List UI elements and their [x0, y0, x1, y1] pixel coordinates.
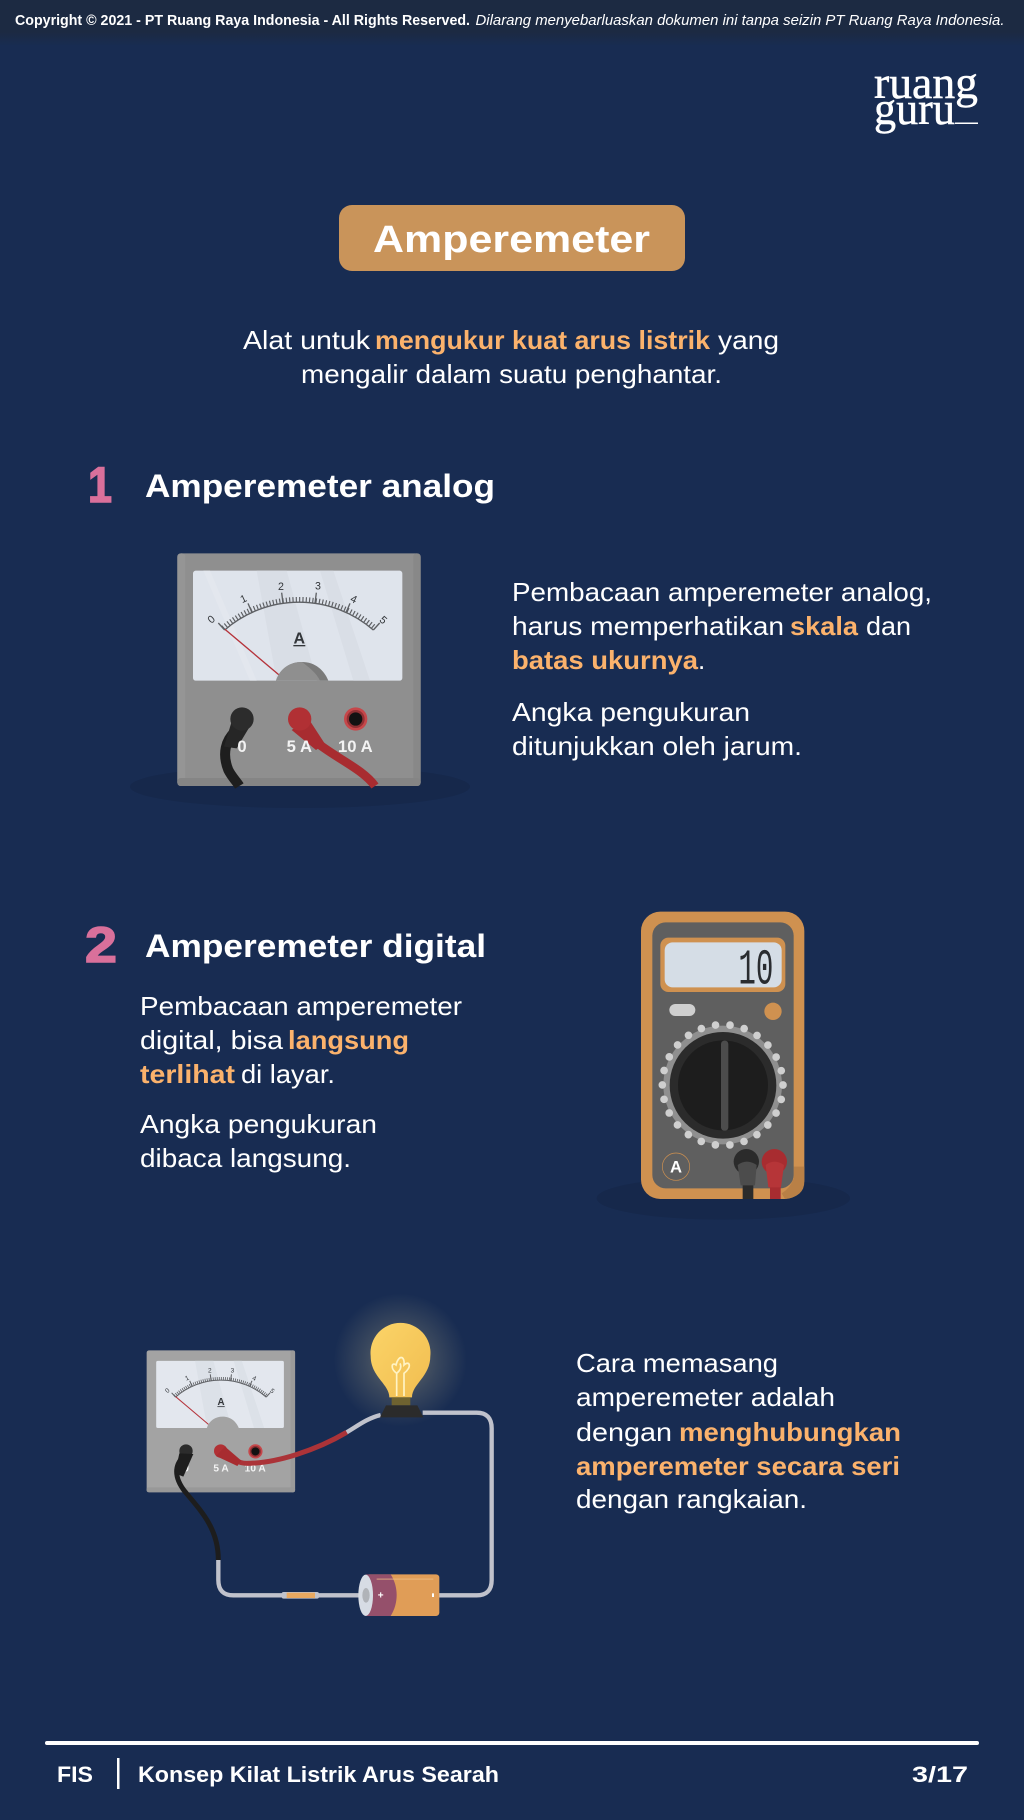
description: digital: Angka pengukuran	[140, 1109, 377, 1139]
battery	[366, 1574, 439, 1616]
footer: Konsep Kilat Listrik Arus Searah	[138, 1762, 499, 1787]
description: analog: ditunjukkan oleh jarum.	[512, 731, 802, 761]
description: analog: skala	[790, 611, 859, 641]
illustration: analog ammeter: 3	[315, 581, 321, 593]
description: circuit: amperemeter adalah	[576, 1382, 835, 1412]
ammeter: 1	[184, 1375, 191, 1383]
display	[660, 938, 785, 992]
description: digital: digital, bisa	[140, 1025, 284, 1055]
ammeter: 4	[251, 1375, 257, 1383]
illustration: analog ammeter: 2	[278, 581, 284, 593]
copyright notice	[15, 13, 1004, 29]
description: circuit: Cara memasang	[576, 1348, 778, 1378]
definition text: mengalir dalam suatu penghantar.	[301, 359, 722, 389]
description: analog: dan	[866, 611, 911, 641]
copyright notice: Copyright © 2021 - PT Ruang Raya Indonesia - All Rights Reserved.	[15, 13, 470, 29]
illustration: analog ammeter	[130, 553, 470, 808]
illustration: analog ammeter: 5 A	[287, 737, 312, 756]
heading 2: Amperemeter digital	[145, 928, 486, 964]
illustration: digital ammeter: A	[670, 1157, 682, 1176]
definition text: Alat untuk	[243, 325, 371, 355]
ammeter: 3	[231, 1367, 235, 1374]
illustration: series circuit: +	[378, 1591, 384, 1602]
description: digital: di layar.	[241, 1059, 335, 1089]
heading 1	[88, 457, 495, 513]
heading 2: 2	[85, 917, 117, 973]
black lead	[177, 1457, 218, 1560]
illustration: analog ammeter: 0	[206, 613, 218, 626]
red lead	[225, 1432, 347, 1463]
description: digital: langsung	[288, 1025, 409, 1055]
description: digital	[140, 991, 462, 1173]
ammeter: 10 A	[245, 1464, 266, 1475]
illustration: analog ammeter: 1	[239, 593, 249, 606]
description: analog: Angka pengukuran	[512, 697, 750, 727]
probes	[743, 1183, 753, 1199]
description: circuit: dengan	[576, 1417, 672, 1447]
footer: 3/17	[912, 1762, 968, 1787]
definition text: mengukur kuat arus listrik	[375, 325, 711, 355]
range badge	[662, 1153, 690, 1180]
bulb	[370, 1323, 430, 1397]
description: circuit	[576, 1348, 901, 1514]
logo: ruangguru: guru	[874, 83, 955, 134]
illustration: analog ammeter: A	[294, 630, 306, 647]
description: digital: dibaca langsung.	[140, 1143, 351, 1173]
heading 1: 1	[88, 457, 112, 513]
illustration: analog ammeter: 10 A	[338, 737, 373, 756]
heading 2	[85, 917, 486, 973]
ammeter: 2	[208, 1368, 212, 1375]
buttons	[669, 1004, 695, 1016]
title badge	[339, 205, 685, 271]
footer: FIS	[57, 1762, 93, 1787]
footer	[45, 1741, 979, 1789]
ammeter: 0	[164, 1387, 172, 1395]
definition text: yang	[718, 325, 779, 355]
ammeter: 5 A	[213, 1464, 229, 1475]
description: circuit: dengan rangkaian.	[576, 1484, 807, 1514]
heading 1: Amperemeter analog	[145, 468, 495, 504]
terminals	[225, 732, 239, 786]
description: analog	[512, 577, 932, 761]
definition text	[243, 325, 779, 389]
ammeter: 0	[183, 1464, 189, 1475]
logo: ruangguru: ruang	[874, 57, 978, 108]
illustration: analog ammeter: 0	[237, 737, 247, 756]
illustration: digital ammeter: 10	[738, 942, 773, 999]
illustration: digital ammeter	[597, 912, 850, 1220]
wires	[423, 1413, 492, 1595]
ammeter: 5	[268, 1388, 276, 1396]
description: digital: Pembacaan amperemeter	[140, 991, 462, 1021]
description: circuit: amperemeter secara seri	[576, 1451, 900, 1481]
logo: ruangguru	[874, 57, 978, 134]
description: circuit: menghubungkan	[679, 1417, 901, 1447]
title badge: Amperemeter	[373, 219, 650, 261]
description: digital: terlihat	[140, 1059, 235, 1089]
dial	[663, 1026, 782, 1144]
illustration: series circuit	[147, 1293, 492, 1616]
copyright notice: Dilarang menyebarluaskan dokumen ini tanpa seizin PT Ruang Raya Indonesia.	[476, 13, 1004, 29]
ammeter	[147, 1350, 295, 1492]
description: analog: harus memperhatikan	[512, 611, 784, 641]
description: analog: batas ukurnya	[512, 645, 699, 675]
illustration: analog ammeter: 5	[377, 614, 389, 627]
illustration: analog ammeter: 4	[348, 593, 359, 606]
description: analog: Pembacaan amperemeter analog,	[512, 577, 932, 607]
ammeter: A	[218, 1397, 225, 1408]
scale	[225, 602, 373, 630]
description: analog: .	[698, 645, 705, 675]
